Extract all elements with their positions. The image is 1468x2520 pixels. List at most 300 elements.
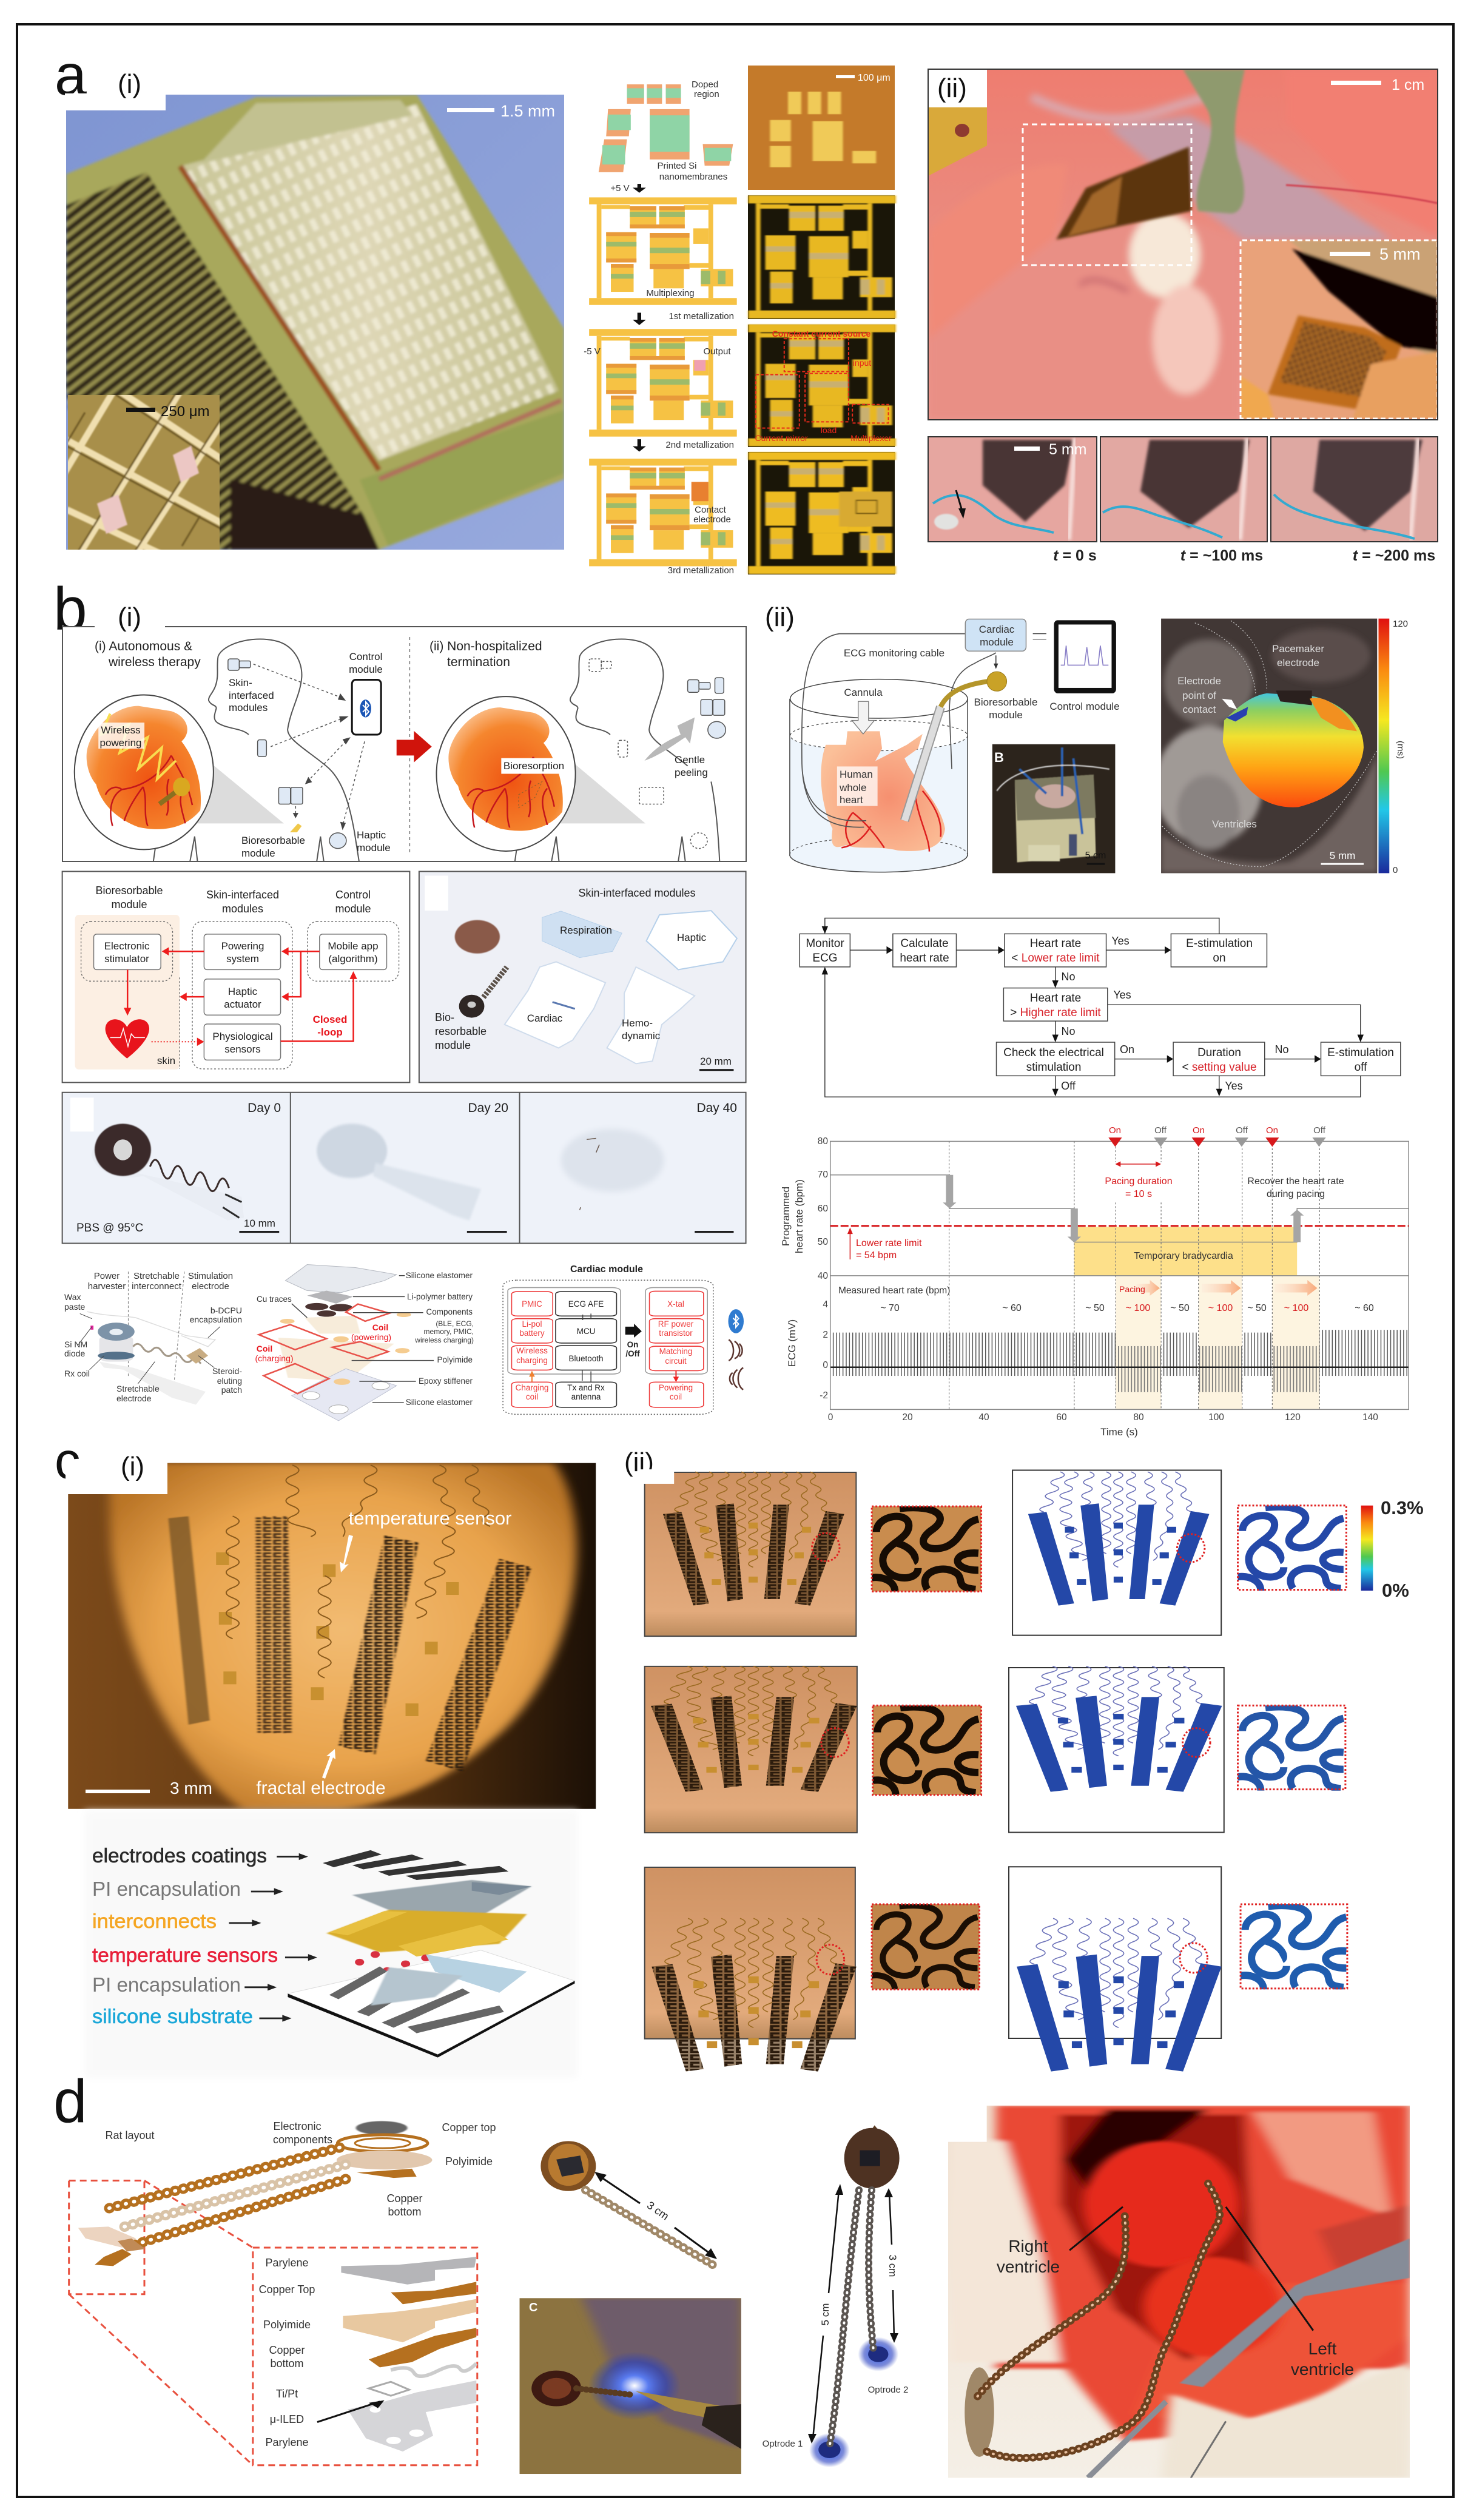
PI lower with electrodes	[329, 1966, 504, 2033]
rat layout labels	[105, 2120, 496, 2218]
green ribbon cable	[1183, 69, 1245, 214]
panel: module photo: 20 mm	[700, 1056, 732, 1067]
chart: programmed heart rate and ECG: ECG (mV)	[786, 1319, 798, 1367]
rat layout labels: Copper top	[442, 2121, 496, 2134]
surgical photo of rat heart: Right	[1008, 2237, 1048, 2256]
surgical photo of rat heart: Left	[1308, 2339, 1337, 2358]
diagram: bioresorbable module anatomy: Power	[94, 1271, 120, 1281]
diagram: cardiac module blocks: PMIC	[522, 1299, 542, 1309]
person outlines	[153, 639, 719, 861]
panel: therapy overview: Bioresorbable	[241, 835, 305, 846]
diagram: cardiac module exploded view: (BLE, ECG,	[436, 1319, 474, 1328]
diagram: bioresorbable module anatomy: interconnect	[132, 1281, 182, 1292]
chart: programmed heart rate and ECG: On	[1266, 1125, 1278, 1136]
panel: therapy overview: modules	[229, 702, 268, 713]
panel: therapy overview: Haptic	[357, 829, 386, 841]
sub-label (i): (i)	[121, 1452, 144, 1481]
panel b	[53, 575, 1409, 1438]
first metallization schematic	[589, 197, 737, 305]
diagram: cardiac module exploded view: (powering)	[351, 1332, 391, 1342]
micrograph: doped regions	[748, 66, 895, 190]
panel: module photo: Cardiac	[527, 1012, 563, 1024]
flowchart: pacing control algorithm: No	[1274, 1043, 1289, 1056]
tablet	[1054, 620, 1116, 693]
schematic: fabrication steps: Contact	[695, 505, 727, 515]
colorbar labels	[1381, 1497, 1424, 1601]
overview text: (i) Autonomous &	[95, 639, 192, 653]
photo: tank B	[992, 744, 1115, 873]
panel label d: d	[53, 2067, 87, 2135]
flowchart: pacing control algorithm: Yes	[1225, 1080, 1243, 1092]
inset layers	[259, 2257, 476, 2451]
time-lapse strip t = ~100 ms	[1100, 437, 1267, 542]
chart: programmed heart rate and ECG: 120	[1285, 1412, 1301, 1423]
schematic: fabrication steps: 3rd metallization	[668, 565, 734, 576]
flowchart: pacing control algorithm: Check the electrical	[1003, 1046, 1104, 1059]
skin modules left	[228, 659, 346, 849]
panel: module photo: Skin-interfaced modules	[578, 887, 696, 899]
serpentine polyimide	[121, 2165, 346, 2228]
diagram: cardiac module blocks: antenna	[571, 1392, 601, 1401]
schematic: fabrication steps: nanomembranes	[659, 172, 727, 182]
sub-label (ii): (ii)	[624, 1447, 654, 1477]
sensors	[216, 1552, 459, 1716]
panel: therapy overview: interfaced	[229, 690, 274, 701]
rat layout labels: Copper	[386, 2192, 423, 2205]
step arrows	[943, 1175, 1304, 1242]
diagram: bioresorbable module anatomy: harvester	[88, 1281, 126, 1292]
device with two optrodes	[763, 2125, 908, 2467]
diagram: cardiac module exploded view: Epoxy stiffener	[419, 1376, 473, 1386]
diagram: exploded multilayer: electrodes coatings	[92, 1844, 267, 1867]
photo: fractal electrodes on heart	[66, 1452, 596, 1809]
inset layers: Polyimide	[263, 2319, 311, 2331]
optical activation map: 5 mm	[1330, 850, 1355, 861]
5 cm arrow: 5 cm	[820, 2303, 831, 2325]
micrograph: second metal with annotated blocks	[748, 325, 896, 447]
panel: module photo: dynamic	[622, 1030, 661, 1042]
panel: block diagram: Control	[335, 889, 371, 901]
heart	[821, 731, 945, 851]
chart: programmed heart rate and ECG: Off	[1236, 1125, 1248, 1136]
chart: programmed heart rate and ECG: 2	[823, 1330, 828, 1340]
chart: programmed heart rate and ECG: Time (s)	[1100, 1426, 1138, 1438]
diagram: cardiac module blocks: MCU	[577, 1327, 595, 1336]
panel: therapy overview: peeling	[675, 767, 708, 778]
yellow clamp	[928, 107, 987, 176]
panel: block diagram: -loop	[317, 1026, 343, 1038]
chart: programmed heart rate and ECG: 70	[818, 1170, 828, 1180]
panel: therapy overview	[62, 602, 746, 861]
temperature sensor label: temperature sensor	[349, 1508, 511, 1529]
diagram: cardiac module exploded view: Polyimide	[437, 1355, 473, 1364]
row 3 photo crop	[867, 1904, 980, 1989]
electrode strips	[168, 1516, 531, 1771]
chain electrodes	[977, 2179, 1220, 2458]
panel b(ii) label: (ii)	[765, 602, 795, 632]
diagram: cardiac module blocks: Wireless	[516, 1346, 548, 1355]
retractor tool	[1180, 2239, 1410, 2387]
rat layout labels: Rat layout	[105, 2129, 155, 2141]
sub-label (i): (i)	[118, 69, 141, 99]
diagram: cardiac module blocks: Cardiac module	[570, 1264, 643, 1275]
panel: module photo: Haptic	[677, 932, 707, 943]
diagram: bioresorbable module anatomy: Stretchable	[116, 1384, 160, 1393]
diagram: cardiac module blocks: On	[627, 1340, 638, 1349]
PI layer top	[352, 1880, 531, 1916]
sub-label (ii): (ii)	[937, 73, 967, 103]
doped region blocks	[599, 84, 733, 172]
diagram: cardiac module exploded view: (charging)	[255, 1353, 294, 1363]
diagram: cardiac module blocks: Bluetooth	[568, 1354, 604, 1363]
panel: module photo: Bio-	[435, 1011, 454, 1023]
flowchart: pacing control algorithm: No	[1061, 971, 1076, 983]
micrograph: doped regions: 100 μm	[858, 73, 891, 83]
diagram: exploded multilayer: interconnects	[92, 1910, 217, 1932]
diagram: human heart perfusion setup	[790, 619, 1120, 872]
time-lapse strip t = 0 s	[928, 437, 1097, 542]
diagram: cardiac module blocks: /Off	[625, 1349, 640, 1358]
photo: flexible electrode array on blue background	[66, 95, 564, 550]
strain colorbar	[1361, 1506, 1373, 1591]
panel: block diagram: Closed	[313, 1014, 347, 1025]
panel: block diagram: Bioresorbable	[95, 884, 163, 897]
serpentine copper top	[109, 2148, 340, 2208]
schematic: fabrication steps: 2nd metallization	[665, 440, 734, 450]
3 cm double arrow: 3 cm	[645, 2199, 671, 2223]
time labels: t = ~100 ms	[1180, 547, 1263, 564]
panel: block diagram: Physiological	[212, 1031, 273, 1042]
layer arrows	[229, 1853, 317, 2022]
flowchart: pacing control algorithm: heart rate	[900, 952, 949, 965]
time labels: t = 0 s	[1053, 547, 1097, 564]
row 1 photo	[638, 1469, 856, 1636]
device photo with 3 cm scale	[540, 2141, 718, 2268]
scale bar 3 mm: 3 mm	[170, 1779, 212, 1797]
photo (ii): device on heart	[928, 69, 1438, 420]
inset: device close-up: 5 mm	[1379, 245, 1421, 263]
diagram: cardiac module blocks: Matching	[659, 1347, 692, 1356]
3 cm double arrow	[594, 2172, 717, 2259]
rat layout labels: bottom	[388, 2206, 422, 2218]
micrograph: third metal	[748, 452, 896, 574]
panel: strain comparison rows	[638, 1469, 1424, 2072]
panel: block diagram: Skin-interfaced	[206, 889, 279, 901]
inset layers: Copper	[269, 2344, 305, 2356]
surgical photo of rat heart	[946, 2105, 1410, 2478]
sub-label cutout (ii)	[927, 68, 987, 107]
flowchart: pacing control algorithm: No	[1061, 1025, 1076, 1037]
row 2 photo crop	[868, 1705, 981, 1795]
diagram: bioresorbable module anatomy: electrode	[116, 1393, 152, 1403]
diagram: bioresorbable module anatomy: paste	[64, 1302, 85, 1312]
chart: programmed heart rate and ECG: Recover the heart rate	[1247, 1176, 1344, 1187]
panel: degradation time series: Day 40	[696, 1101, 737, 1115]
rat layout labels: Polyimide	[445, 2155, 493, 2168]
diagram: exploded multilayer: PI encapsulation	[92, 1878, 241, 1900]
panel label c: c	[55, 1432, 80, 1490]
chart: programmed heart rate and ECG: 60	[1056, 1412, 1067, 1423]
photo: glowing LED with tweezers	[520, 2298, 741, 2474]
micrograph: second metal with annotated blocks: load	[821, 425, 837, 435]
row 1 simulation crop	[1233, 1506, 1346, 1591]
micrograph: first metal	[748, 195, 896, 319]
panel: block diagram: system	[226, 953, 259, 965]
panel: block diagram: actuator	[224, 999, 261, 1010]
optrode serpentines	[830, 2190, 859, 2445]
diagram: human heart perfusion setup: Cannula	[844, 687, 883, 698]
diagram: cardiac module blocks: coil	[526, 1392, 538, 1401]
diagram: human heart perfusion setup: Human	[840, 769, 873, 780]
time labels: t = ~200 ms	[1353, 547, 1435, 564]
optical activation map: point of	[1182, 690, 1216, 701]
inset layers: μ-ILED	[270, 2413, 304, 2425]
panel: module photo: Hemo-	[622, 1017, 653, 1029]
panel: therapy overview: Control	[349, 651, 382, 662]
diagram: bioresorbable module anatomy: Si NM	[64, 1339, 87, 1349]
flowchart: pacing control algorithm: Off	[1061, 1080, 1076, 1092]
micrograph: second metal with annotated blocks: Constant current source	[772, 329, 871, 339]
white cutout next to (ii)	[642, 1471, 644, 1472]
dashed zoom callout	[69, 2180, 477, 2465]
diagram: human heart perfusion setup: module	[989, 709, 1023, 721]
flowchart: pacing control algorithm: Yes	[1111, 935, 1130, 947]
panel d	[53, 2067, 1410, 2478]
Ti/Pt trace	[391, 2363, 476, 2376]
row 1 simulation	[1012, 1470, 1221, 1636]
label backgrounds	[98, 723, 144, 749]
flowchart: pacing control algorithm: Calculate	[900, 937, 949, 950]
panel: block diagram: Mobile app	[328, 940, 379, 952]
panel: degradation time series: PBS @ 95°C	[76, 1222, 143, 1235]
micrograph: second metal with annotated blocks: Multiplexer	[850, 433, 892, 443]
white label cutout	[65, 93, 166, 110]
diagram: bioresorbable module anatomy: Stimulation	[188, 1271, 233, 1281]
flowchart: pacing control algorithm: stimulation	[1026, 1061, 1081, 1074]
magnification wedges	[185, 763, 284, 823]
diagram: exploded multilayer: silicone substrate	[92, 2005, 253, 2027]
diagram: cardiac module exploded view: Components	[426, 1307, 473, 1316]
Day 40 residue	[561, 1129, 664, 1191]
fractal electrode label	[256, 1749, 386, 1798]
optical activation map: electrode	[1277, 657, 1319, 669]
panel: block diagram: Powering	[221, 940, 264, 952]
flowchart: pacing control algorithm: Yes	[1113, 989, 1131, 1001]
diagram: human heart perfusion setup: ECG monitoring cable	[844, 647, 944, 659]
photo: tank B: B	[994, 750, 1004, 765]
surgical photo of rat heart: ventricle	[997, 2257, 1060, 2276]
diagram: cardiac module blocks: ECG AFE	[568, 1299, 604, 1309]
diagram: cardiac module blocks	[503, 1264, 744, 1414]
chart: programmed heart rate and ECG: ~ 70	[880, 1303, 900, 1313]
panel: block diagram: sensors	[224, 1043, 261, 1055]
inset: device close-up	[1241, 240, 1438, 419]
diagram: cardiac module blocks: Charging	[516, 1383, 548, 1392]
diagram: cardiac module exploded view: Coil	[372, 1322, 388, 1332]
diagram: cardiac module blocks: Li-pol	[522, 1319, 542, 1329]
flowchart: pacing control algorithm: < Lower rate limit	[1011, 952, 1100, 965]
3 cm arrow	[884, 2188, 898, 2343]
diagram: exploded multilayer: temperature sensors	[92, 1944, 278, 1966]
micrograph: second metal with annotated blocks: Current mirror	[755, 433, 808, 443]
schematic: fabrication steps: +5 V	[610, 183, 630, 194]
diagram: cardiac module blocks: X-tal	[667, 1299, 684, 1309]
panel: module photo: resorbable	[435, 1025, 487, 1037]
diagram: human heart perfusion setup: Bioresorbable	[974, 696, 1037, 708]
row 3 photo	[645, 1867, 857, 2072]
pointer lines	[1069, 2207, 1313, 2331]
temperature sensors spheres	[355, 1951, 469, 1982]
diagram: cardiac module blocks: circuit	[665, 1356, 687, 1366]
5 cm arrow	[808, 2184, 843, 2444]
inset micrograph 250 μm: 250 μm	[161, 403, 210, 420]
detached modules right	[688, 678, 726, 738]
parylene top	[341, 2257, 476, 2285]
panel: therapy overview: (i)	[118, 602, 141, 632]
substrate	[288, 1950, 574, 2055]
serpentine copper bottom	[127, 2179, 346, 2247]
chart: programmed heart rate and ECG	[780, 1125, 1409, 1438]
inset border	[1241, 240, 1438, 420]
panel: degradation time series	[62, 1093, 746, 1244]
chart: programmed heart rate and ECG: 40	[818, 1271, 828, 1281]
diagram: cardiac module exploded view: Coil	[257, 1344, 272, 1353]
diagram: human heart perfusion setup: heart	[840, 794, 863, 806]
diagram: human heart perfusion setup: whole	[839, 782, 866, 793]
electrode tube	[904, 707, 941, 821]
chart: programmed heart rate and ECG: 4	[823, 1299, 828, 1310]
optical activation map	[1154, 619, 1408, 875]
schematic: fabrication steps: region	[694, 89, 719, 99]
chart: programmed heart rate and ECG: = 10 s	[1125, 1189, 1152, 1199]
cardiac module box	[965, 619, 1026, 651]
panel: block diagram: modules	[222, 903, 263, 915]
doped region labels: Doped	[692, 79, 718, 90]
parylene bottom	[348, 2380, 476, 2451]
diagram: bioresorbable module anatomy	[64, 1271, 242, 1405]
panel: therapy overview: module	[241, 847, 275, 859]
chart: programmed heart rate and ECG: Off	[1313, 1125, 1326, 1136]
diagram: cardiac module exploded view: wireless charging)	[414, 1336, 474, 1344]
diagram: bioresorbable module anatomy: Rx coil	[64, 1369, 90, 1378]
diagram: cardiac module blocks: Tx and Rx	[567, 1383, 605, 1392]
flowchart: pacing control algorithm: E-stimulation	[1186, 937, 1253, 950]
chart: programmed heart rate and ECG: 60	[818, 1204, 828, 1214]
chart: programmed heart rate and ECG: ~ 100	[1208, 1303, 1233, 1313]
row 3 simulation	[1009, 1867, 1222, 2072]
flowchart: pacing control algorithm: off	[1355, 1061, 1367, 1074]
inset layers: bottom	[270, 2357, 304, 2370]
optical activation map: 0	[1393, 865, 1398, 875]
left heart circle	[75, 695, 214, 849]
chart: programmed heart rate and ECG: heart rate (bpm)	[793, 1179, 805, 1253]
panel label b: b	[53, 575, 87, 643]
chart: programmed heart rate and ECG: ~ 50	[1085, 1303, 1105, 1313]
panel: therapy overview: Skin-	[229, 677, 252, 689]
colorbar labels: 0%	[1382, 1580, 1409, 1601]
inset layers: Parylene	[265, 2257, 309, 2269]
diagram: bioresorbable module anatomy: eluting	[217, 1376, 242, 1386]
diagram: bioresorbable module anatomy: b-DCPU	[210, 1305, 242, 1315]
optical activation map: 120	[1393, 619, 1408, 629]
inset layers: Parylene	[265, 2436, 309, 2448]
surgical photo of rat heart: ventricle	[1291, 2360, 1354, 2379]
chart: programmed heart rate and ECG: Temporary bradycardia	[1134, 1251, 1233, 1261]
chart: programmed heart rate and ECG: Lower rate limit	[856, 1238, 922, 1248]
panel: module photo: Respiration	[560, 925, 612, 936]
flowchart: pacing control algorithm: Duration	[1197, 1046, 1241, 1059]
panel: therapy overview: Bioresorption	[503, 760, 564, 772]
white label cutout	[66, 1461, 167, 1494]
overview text	[95, 639, 542, 669]
copper top	[391, 2282, 476, 2304]
chart: programmed heart rate and ECG: 50	[818, 1237, 828, 1247]
temperature sensor label	[337, 1508, 511, 1572]
chart: programmed heart rate and ECG: On	[1193, 1125, 1205, 1136]
panel: block diagram: Haptic	[228, 986, 258, 997]
schematic: fabrication steps: Output	[703, 346, 731, 357]
flowchart: pacing control algorithm: E-stimulation	[1327, 1046, 1394, 1059]
chart: programmed heart rate and ECG: 0	[823, 1360, 828, 1370]
chart: programmed heart rate and ECG: ~ 50	[1170, 1303, 1190, 1313]
diagram: cardiac module exploded view: Silicone elastomer	[406, 1398, 473, 1407]
control module phone	[352, 680, 381, 735]
time labels	[1053, 547, 1435, 564]
gentle peeling arrow	[644, 718, 695, 761]
diagram: exploded multilayer	[85, 1811, 577, 2078]
diagram: cardiac module blocks: Powering	[659, 1383, 693, 1392]
panel: block diagram: Electronic	[104, 940, 150, 952]
schematic: fabrication steps	[584, 79, 737, 576]
Day 0 device	[92, 1124, 244, 1221]
diagram: human heart perfusion setup: Control module	[1049, 701, 1120, 712]
chart: programmed heart rate and ECG: ~ 100	[1126, 1303, 1150, 1313]
chart: programmed heart rate and ECG: ~ 100	[1284, 1303, 1308, 1313]
ECG trace	[830, 1330, 1409, 1392]
scale bar 1 cm	[1331, 76, 1424, 93]
flowchart: pacing control algorithm: Heart rate	[1030, 992, 1081, 1005]
panel: therapy overview: Gentle	[675, 754, 705, 766]
chart: programmed heart rate and ECG: 140	[1362, 1412, 1378, 1423]
interconnect layer	[326, 1910, 527, 1952]
diagram: bioresorbable module anatomy: diode	[64, 1349, 85, 1358]
right heart circle	[437, 696, 576, 851]
schematic: fabrication steps: Printed Si	[657, 161, 697, 171]
device sheet	[1056, 147, 1191, 240]
panel: therapy overview: Wireless	[101, 724, 141, 736]
device with two optrodes: Optrode 2	[868, 2385, 908, 2395]
row 3 simulation crop	[1236, 1904, 1347, 1989]
diagram: human heart perfusion setup: Cardiac	[979, 624, 1015, 635]
inset layers: Ti/Pt	[276, 2388, 298, 2400]
diagram: cardiac module exploded view: Silicone elastomer	[406, 1271, 473, 1280]
panel a	[55, 43, 1438, 576]
chart: programmed heart rate and ECG: Pacing duration	[1105, 1176, 1173, 1187]
photo border line	[928, 69, 1438, 420]
optical activation map: Ventricles	[1212, 818, 1257, 830]
electronic components and coil hub	[356, 2121, 408, 2135]
optical activation map: contact	[1183, 704, 1216, 715]
chart: programmed heart rate and ECG: 40	[978, 1412, 989, 1423]
tank	[790, 736, 968, 872]
chart: programmed heart rate and ECG: 80	[1133, 1412, 1144, 1423]
flowchart: pacing control algorithm: > Higher rate limit	[1010, 1006, 1101, 1019]
overview text: wireless therapy	[108, 655, 201, 669]
panel: block diagram: module	[335, 903, 371, 915]
chart: programmed heart rate and ECG: ~ 50	[1247, 1303, 1267, 1313]
cables	[802, 634, 996, 827]
bluetooth glyph	[363, 702, 369, 715]
